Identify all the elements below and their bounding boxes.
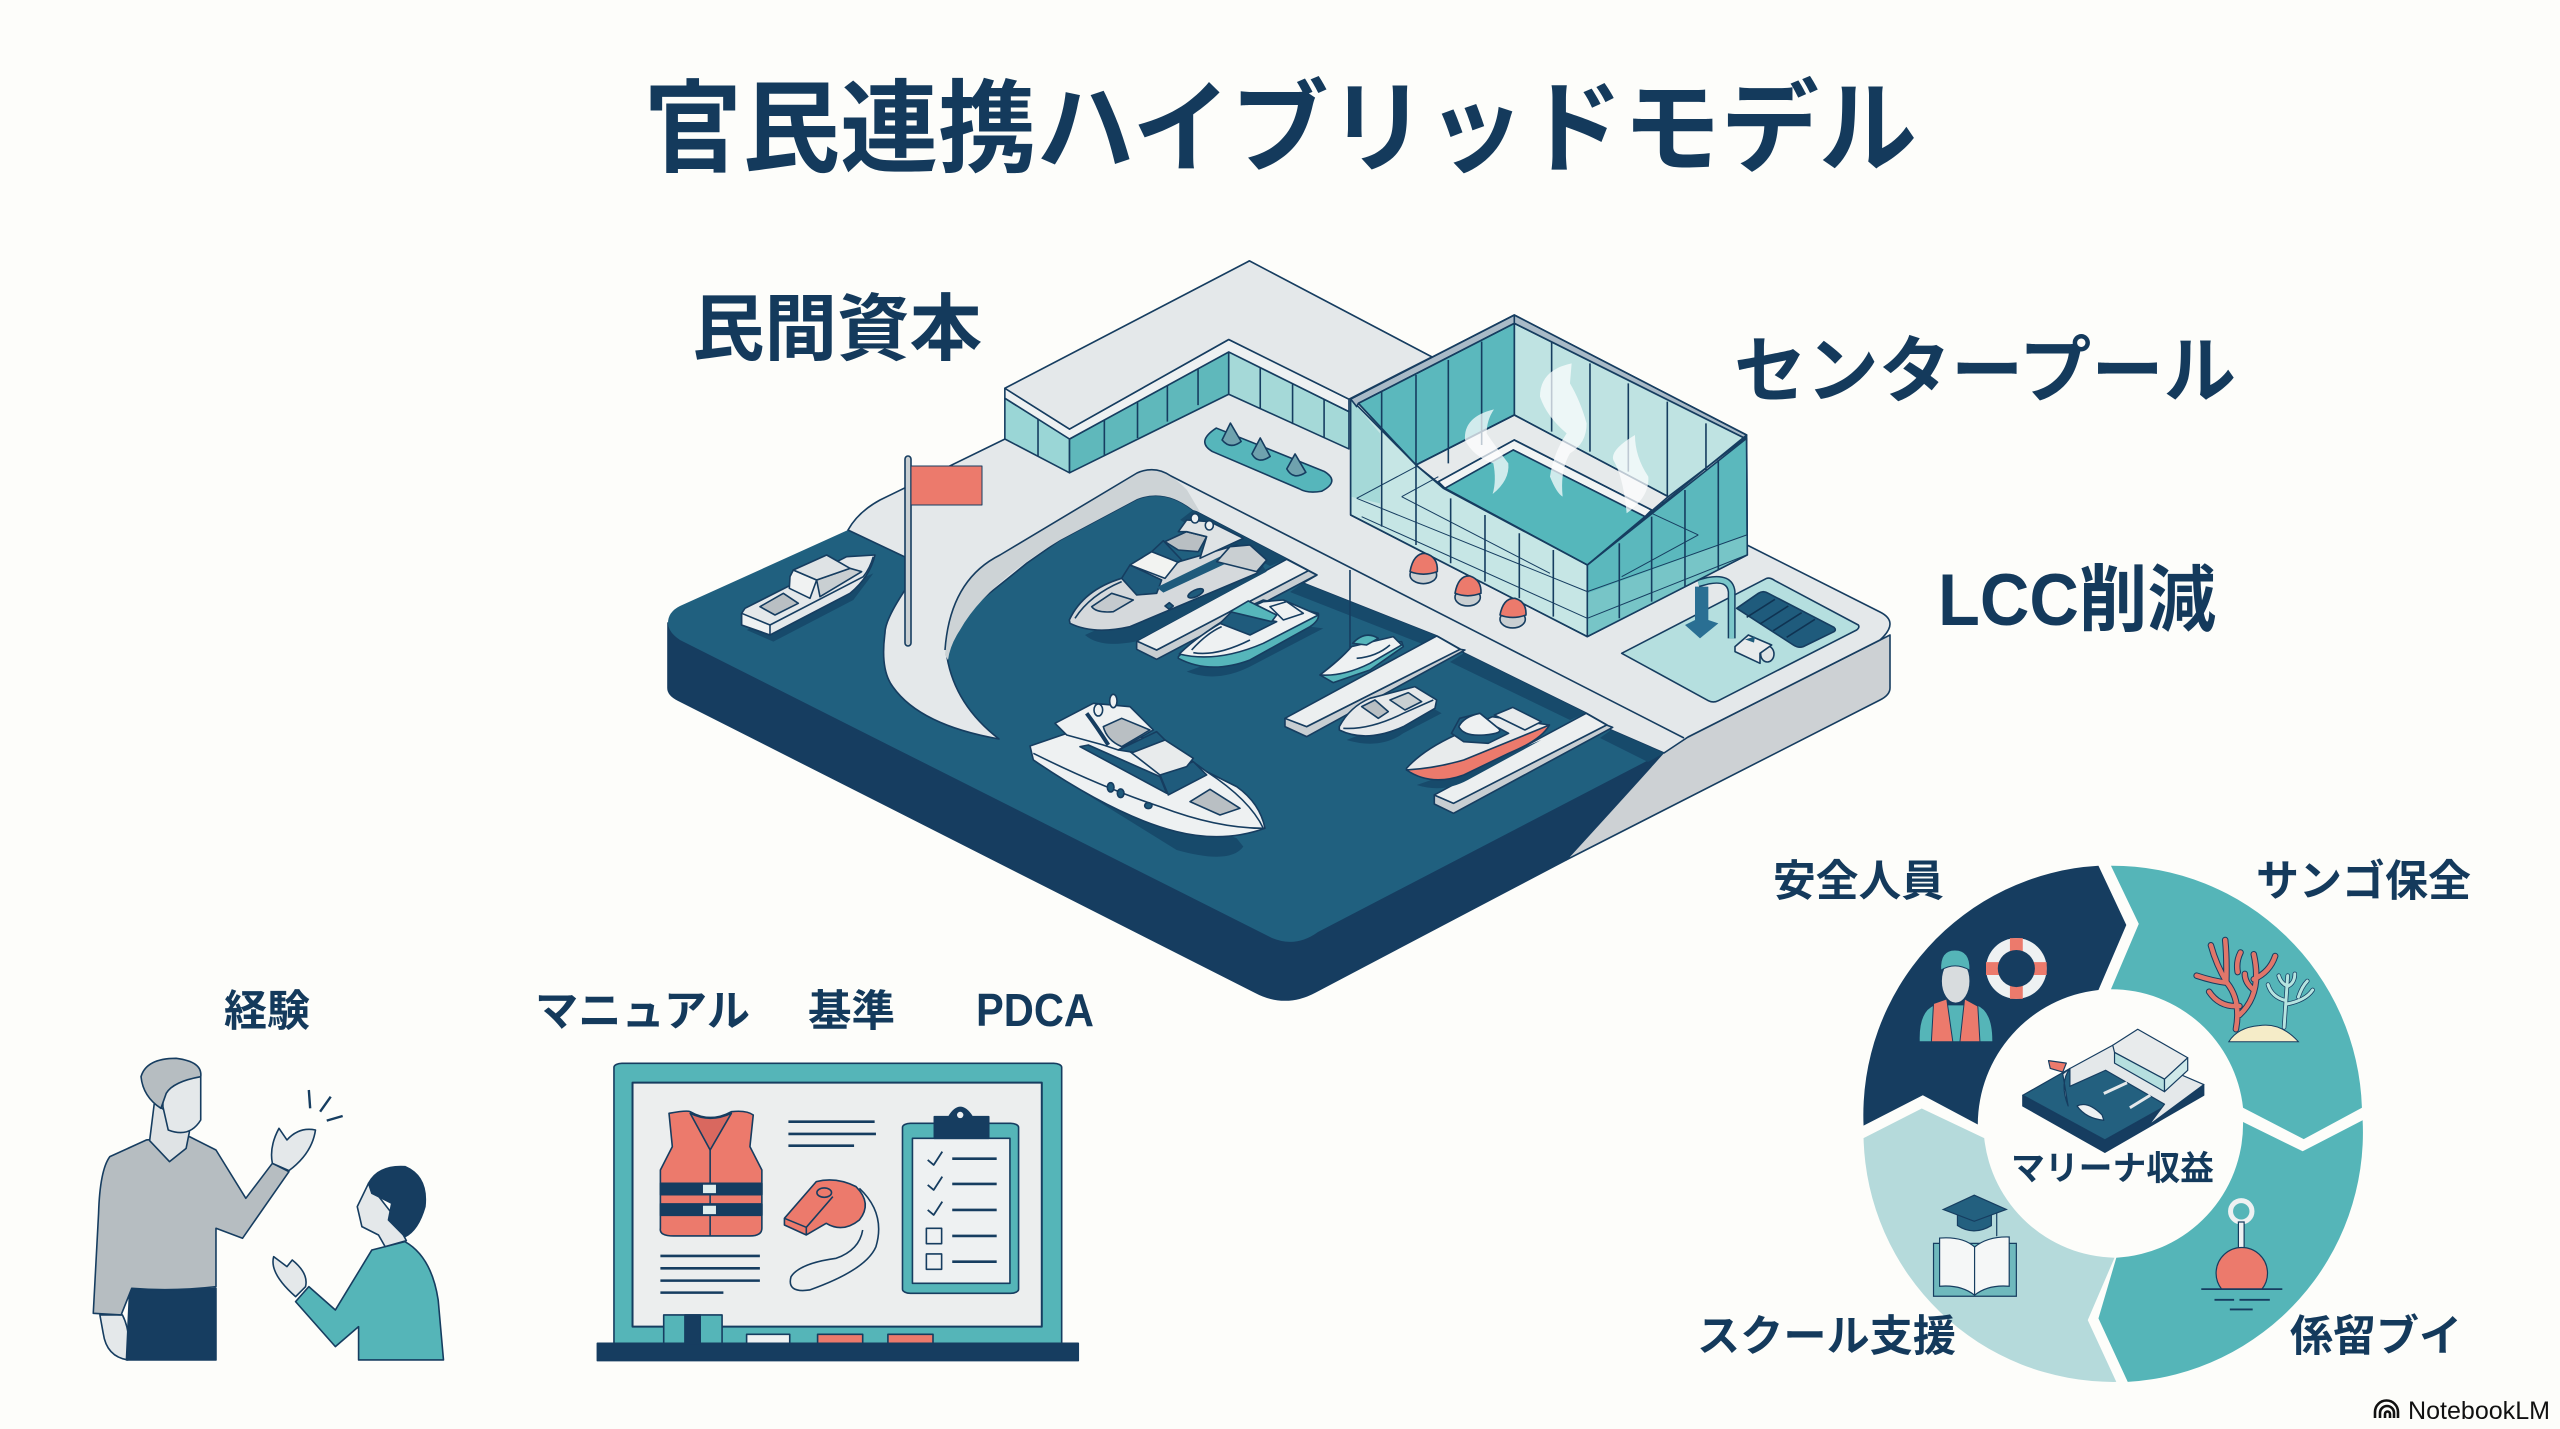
icon: mooring buoy bbox=[2201, 1201, 2282, 1309]
revenue cycle diagram bbox=[1863, 866, 2363, 1382]
pool water bbox=[1445, 450, 1645, 565]
boat: small white bbox=[1339, 687, 1442, 744]
pool rim bbox=[1416, 415, 1668, 517]
label: private capital: 民間資本 bbox=[692, 289, 982, 370]
harbor edge shadows bbox=[1180, 510, 1664, 762]
whistle bbox=[784, 1180, 879, 1291]
center icon: mini marina bbox=[2023, 1029, 2204, 1152]
boat: large yacht bbox=[1030, 694, 1265, 857]
segment: coral conservation bbox=[2111, 866, 2362, 1139]
board frame bbox=[614, 1063, 1062, 1347]
dock 3 bbox=[1434, 713, 1613, 813]
marina isometric illustration bbox=[668, 261, 1890, 1000]
boat: teal bbox=[1178, 600, 1323, 676]
center pool glass building bbox=[1351, 315, 1747, 637]
platform base side bbox=[668, 623, 1664, 1000]
boat: small with mast bbox=[1320, 570, 1403, 683]
watermark: NotebookLM: NotebookLM bbox=[2408, 1397, 2550, 1425]
buoys bbox=[1410, 553, 1526, 628]
mentor and learner figures bbox=[93, 1058, 443, 1360]
clipboard checklist bbox=[902, 1107, 1019, 1293]
machinery pad: solar panel, pipe and arrow bbox=[1622, 578, 1859, 702]
board screen bbox=[633, 1083, 1042, 1327]
text lines bbox=[660, 1122, 876, 1293]
boat: large top bbox=[1069, 514, 1267, 644]
label: school support: スクール支援 bbox=[1697, 1313, 1956, 1361]
boat: red hull bbox=[1407, 707, 1549, 788]
label: center pool: センタープール bbox=[1734, 331, 2236, 412]
label: mooring buoys: 係留ブイ bbox=[2290, 1313, 2462, 1361]
label: coral conservation: サンゴ保全 bbox=[2256, 858, 2471, 906]
label: marina revenue: マリーナ収益 bbox=[2011, 1150, 2214, 1188]
steam bbox=[1465, 363, 1648, 513]
tray bbox=[597, 1315, 1078, 1361]
segment: safety staff bbox=[1863, 866, 2126, 1126]
label: experience: 経験 bbox=[224, 988, 310, 1036]
mentor bbox=[93, 1058, 343, 1360]
segment: school support bbox=[1864, 1108, 2116, 1382]
breakwater inner rim bbox=[945, 470, 1200, 660]
grid lines bbox=[1351, 315, 1747, 637]
label: LCC reduction: LCC削減 bbox=[1938, 560, 2216, 641]
dock 2 bbox=[1285, 636, 1465, 737]
harbor water bbox=[668, 470, 1664, 942]
learner bbox=[273, 1167, 443, 1360]
title: 官民連携ハイブリッドモデル bbox=[644, 74, 1917, 186]
icon: life ring bbox=[1986, 938, 2047, 999]
icon: graduation book bbox=[1934, 1195, 2016, 1296]
label: manual: マニュアル bbox=[535, 988, 750, 1036]
segment: mooring buoys bbox=[2098, 1120, 2363, 1382]
icon: coral bbox=[2197, 940, 2313, 1042]
boat: far left bbox=[742, 555, 875, 642]
label: standards: 基準 bbox=[808, 988, 895, 1036]
label: PDCA: PDCA bbox=[976, 984, 1094, 1036]
dock 1 bbox=[1137, 559, 1317, 659]
fountain planter bbox=[1205, 423, 1332, 492]
glass walls bbox=[1358, 323, 1514, 465]
life vest bbox=[660, 1111, 762, 1236]
office building bbox=[1005, 261, 1432, 473]
flag bbox=[905, 456, 982, 646]
safety manual board bbox=[597, 1063, 1078, 1361]
icon: lifeguard bbox=[1919, 950, 1993, 1042]
label: safety staff: 安全人員 bbox=[1773, 858, 1944, 906]
concrete right wall bbox=[1566, 635, 1890, 860]
concrete deck and curved breakwater bbox=[848, 261, 1890, 753]
